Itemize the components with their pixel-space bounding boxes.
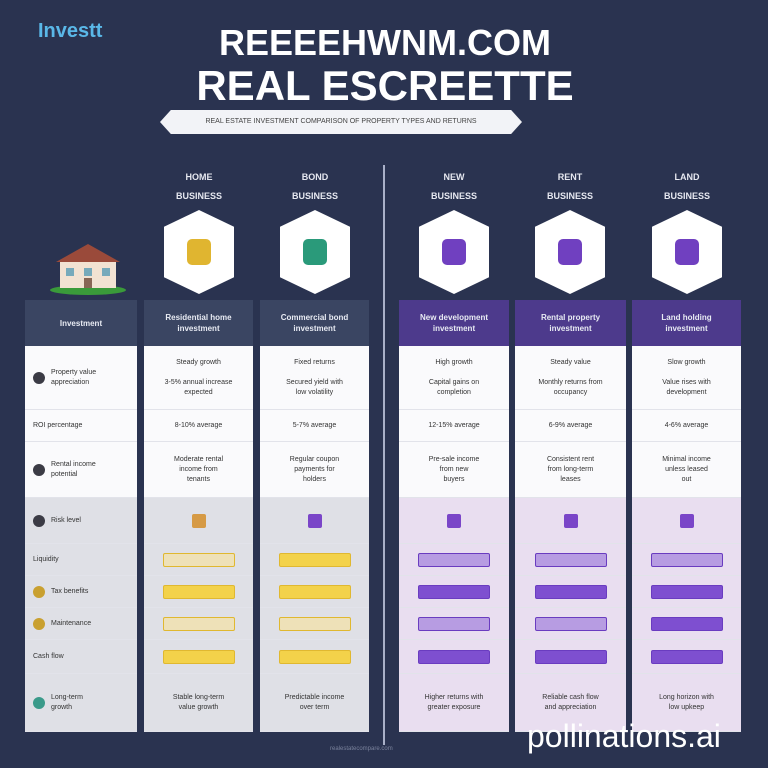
panel: label column: Cash flow [33, 652, 64, 660]
panel: column 3: 12-15% average [428, 422, 480, 428]
text: RENT [558, 172, 582, 182]
panel: column 3: Pre-sale income [429, 456, 479, 462]
panel: label column: Maintenance [51, 620, 91, 626]
icon: house [50, 244, 126, 295]
panel: label column: potential [51, 470, 77, 478]
text: BUSINESS [547, 191, 593, 201]
watermark: pollinations.ai [527, 718, 721, 754]
panel: column 3: completion [437, 388, 471, 396]
panel: column 4: leases [560, 476, 581, 482]
panel: column 2: investment [293, 324, 336, 333]
panel: label column: Risk level [51, 516, 81, 524]
hexagon icons [164, 210, 234, 294]
panel: column 1 [144, 300, 253, 732]
panel: column 4: Consistent rent [547, 456, 594, 462]
panel: column 3: investment [433, 324, 475, 333]
panel: column 1: Residential home [165, 313, 232, 322]
panel: column 4: and appreciation [545, 704, 596, 710]
panel: column 3 [399, 300, 509, 732]
text: BUSINESS [431, 191, 477, 201]
panel: column 5: investment [665, 324, 708, 333]
panel: column 5: Minimal income [662, 456, 711, 462]
column titles: BUSINESS [176, 191, 222, 201]
panel: column 5: Slow growth [667, 358, 706, 366]
panel: column 3: buyers [443, 476, 464, 482]
panel: column 2: Secured yield with [286, 378, 343, 386]
panel: column 3: New development [420, 313, 488, 322]
subtitle bar: REAL ESTATE INVESTMENT COMPARISON OF PROPERTY TYPES AND RETURNS [205, 118, 477, 125]
panel: column 5: Value rises with [662, 378, 711, 386]
panel: label column: ROI percentage [33, 422, 82, 428]
logo: Investt [38, 20, 102, 42]
panel: label column: Long-term [51, 694, 83, 700]
panel: label column: growth [51, 704, 72, 710]
panel: label column: Property value [51, 368, 96, 376]
panel: column 1: investment [177, 324, 220, 333]
panel: column 3: from new [440, 466, 468, 472]
panel: column 4: investment [549, 324, 592, 333]
column titles [176, 172, 222, 201]
panel: column 1: Moderate rental [174, 456, 223, 462]
panel: column 1: expected [184, 388, 213, 396]
panel: column 2: Predictable income [285, 694, 344, 700]
panel: label column: Investment [60, 318, 102, 328]
panel: label column: Liquidity [33, 556, 59, 562]
panel: column 4: Reliable cash flow [542, 694, 599, 700]
panel: label column [25, 300, 137, 732]
panel: column 4: Rental property [541, 313, 600, 322]
panel: label column: Tax benefits [51, 588, 88, 594]
subtitle bar [160, 110, 522, 134]
panel: column 4: Steady value [550, 358, 591, 366]
panel: column 4: occupancy [554, 388, 587, 396]
panel: column 3: Capital gains on [429, 378, 479, 386]
panel: column 5 [632, 300, 741, 732]
panel: column 5: 4-6% average [665, 422, 708, 428]
panel: column 1: 3-5% annual increase [165, 378, 232, 386]
title: REEEEHWNM.COM [219, 22, 551, 63]
panel: column 5: unless leased [665, 466, 708, 472]
panel: column 2 [260, 300, 369, 732]
title: REAL ESCREETTE [196, 62, 574, 109]
panel: column 1: 8-10% average [175, 422, 222, 428]
panel: label column: Rental income [51, 460, 96, 468]
text: NEW [444, 172, 464, 182]
text: LAND [674, 172, 700, 182]
panel: column 1: Stable long-term [173, 694, 224, 700]
panel: column 5: low upkeep [669, 704, 704, 710]
divider [383, 165, 385, 745]
column titles: HOME [186, 172, 212, 182]
panel: column 2: Regular coupon [290, 456, 339, 462]
panel: column 1: tenants [187, 476, 210, 482]
panel: column 3: greater exposure [428, 704, 480, 710]
text: BUSINESS [664, 191, 710, 201]
panel: column 2: Fixed returns [294, 358, 335, 366]
panel: column 3: High growth [435, 358, 473, 366]
panel: column 1: income from [179, 466, 218, 472]
panel: column 4: Monthly returns from [538, 378, 603, 386]
panel: column 4: from long-term [548, 466, 593, 472]
title [196, 22, 574, 109]
panel: column 2: over term [300, 704, 329, 710]
panel: column 2: Commercial bond [281, 313, 348, 322]
panel: label column: appreciation [51, 378, 89, 386]
footer note: realestatecompare.com [330, 746, 393, 752]
panel: column 5: development [666, 388, 707, 396]
panel: column 4: 6-9% average [549, 422, 592, 428]
panel: column 5: Land holding [661, 313, 712, 322]
panel: column 3: Higher returns with [425, 694, 483, 700]
panel: column 4 [515, 300, 626, 732]
panel: column 1: value growth [179, 704, 218, 710]
text: BOND [302, 172, 328, 182]
text: BUSINESS [292, 191, 338, 201]
panel: column 2: 5-7% average [293, 422, 336, 428]
panel: column 1: Steady growth [176, 358, 221, 366]
panel: column 2: holders [303, 476, 326, 482]
panel: column 5: Long horizon with [659, 694, 714, 700]
panel: column 2: low volatility [296, 388, 333, 396]
panel: column 2: payments for [294, 466, 335, 472]
panel: column 5: out [682, 476, 691, 482]
